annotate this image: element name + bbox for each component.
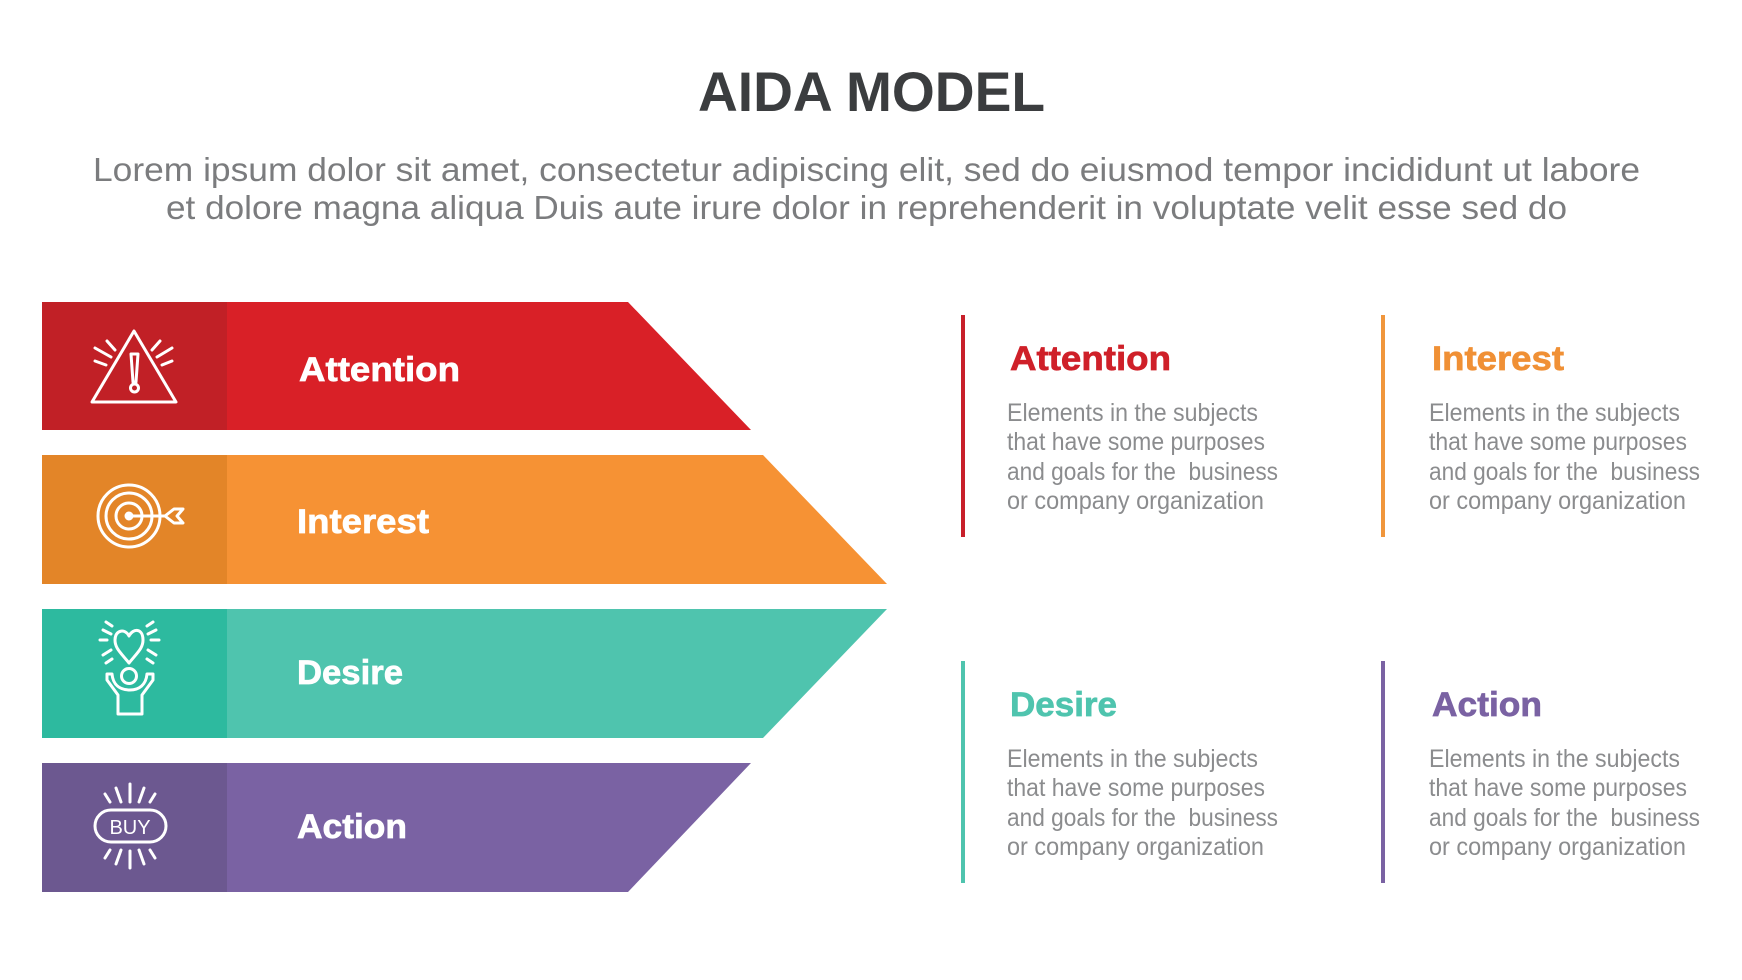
panel: action description	[1381, 661, 1700, 883]
panel: interest arrow bar	[42, 455, 887, 584]
panel: interest description	[1381, 315, 1700, 537]
label: interest: Interest	[297, 503, 429, 541]
text block: interest: that have some purposes	[1429, 428, 1687, 456]
icon: warning triangle	[92, 331, 176, 402]
panel: desire arrow bar	[42, 609, 887, 738]
icon: buy button	[95, 784, 166, 868]
text block: action: that have some purposes	[1429, 774, 1687, 802]
label: desire: Desire	[297, 654, 403, 692]
icon: target with arrow	[98, 485, 183, 547]
text block: interest: or company organization	[1429, 487, 1686, 515]
text block: desire: that have some purposes	[1007, 774, 1265, 802]
text block: desire: Elements in the subjects	[1007, 745, 1258, 773]
text block: interest: and goals for the business	[1429, 458, 1700, 486]
label: attention: Attention	[299, 351, 460, 389]
panel: attention arrow bar	[42, 302, 751, 430]
text block: attention: that have some purposes	[1007, 428, 1265, 456]
panel: action arrow bar	[42, 763, 751, 892]
heading: interest: Interest	[1432, 340, 1564, 378]
panel: desire description	[961, 661, 1278, 883]
text block: action: and goals for the business	[1429, 804, 1700, 832]
text block: desire	[1007, 745, 1278, 861]
text block: attention: or company organization	[1007, 487, 1264, 515]
subtitle text: et dolore magna aliqua Duis aute irure dolor in reprehenderit in voluptate velit esse sed do	[166, 189, 1567, 226]
label: action: Action	[297, 808, 407, 846]
icon label: buy: BUY	[109, 817, 151, 839]
text block: desire: or company organization	[1007, 833, 1264, 861]
text block: desire: and goals for the business	[1007, 804, 1278, 832]
heading: action: Action	[1432, 686, 1542, 724]
text block: interest: Elements in the subjects	[1429, 399, 1680, 427]
title: AIDA MODEL	[698, 60, 1045, 123]
text block: action	[1429, 745, 1700, 861]
heading: attention: Attention	[1010, 340, 1171, 378]
subtitle text: Lorem ipsum dolor sit amet, consectetur adipiscing elit, sed do eiusmod tempor incididunt ut labore	[93, 151, 1640, 188]
text block: action: or company organization	[1429, 833, 1686, 861]
icon: hands holding heart	[100, 622, 159, 714]
panel: attention description	[961, 315, 1278, 537]
subtitle text	[93, 151, 1640, 226]
text block: action: Elements in the subjects	[1429, 745, 1680, 773]
text block: attention	[1007, 399, 1278, 515]
text block: attention: and goals for the business	[1007, 458, 1278, 486]
heading: desire: Desire	[1010, 686, 1117, 724]
text block: interest	[1429, 399, 1700, 515]
text block: attention: Elements in the subjects	[1007, 399, 1258, 427]
